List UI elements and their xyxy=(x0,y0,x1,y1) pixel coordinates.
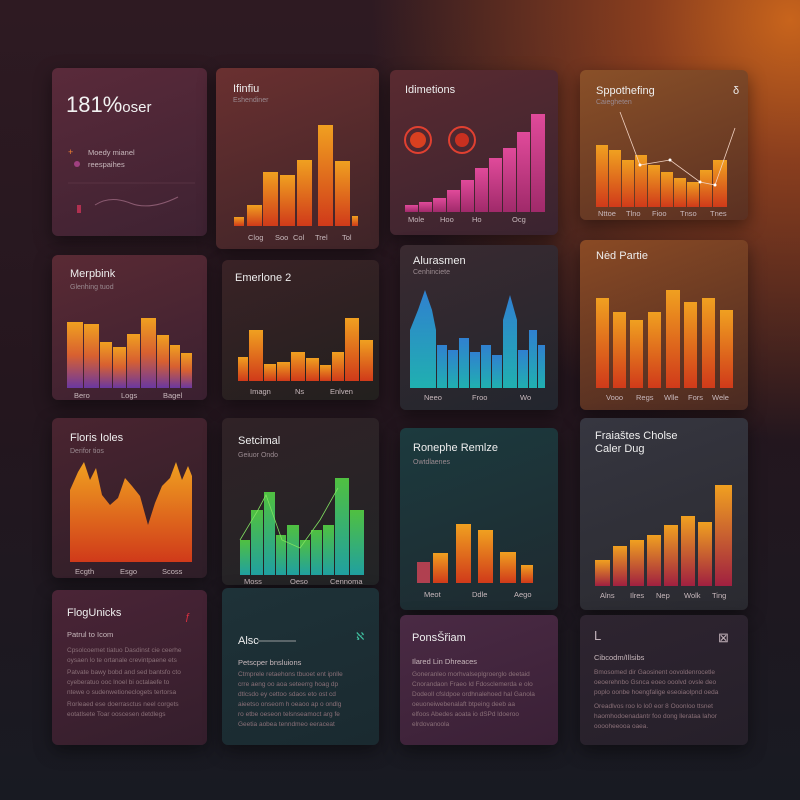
card: magenta chart: Ho xyxy=(472,215,482,224)
card: text 1: cyeberatuo ooc lnoel bi octalaefe to xyxy=(67,679,170,686)
card: rising bars: Fraiaštes Cholse xyxy=(595,430,678,442)
card: text 2: Geetia aobea tenndmeo eeraceat xyxy=(238,721,335,728)
card: text 2: aieetso onseom h oeaoo ap o ondlg xyxy=(238,701,342,708)
card: jagged area: Ecgth xyxy=(75,567,94,576)
card: text 3 xyxy=(400,615,558,745)
card: magenta chart xyxy=(390,70,558,235)
card: gradient bars purple: Glenhing tuod xyxy=(70,284,114,291)
card: text 2: crre aeng oo aoa seteerrg hoag dp xyxy=(238,681,338,688)
card: teal spiky: Froo xyxy=(472,393,487,402)
card: jagged area xyxy=(52,418,207,578)
card: teal spiky: Cenhinciete xyxy=(413,269,450,276)
card: jagged area: Floris Ioles xyxy=(70,432,124,444)
card: text 1: ntewe o sudenwetioneclogets tertorsa xyxy=(67,689,177,696)
card: rising bars xyxy=(580,418,748,610)
card: text 4: Cibcodm/Illsibs xyxy=(594,653,645,662)
card: teal bars: Ddle xyxy=(472,590,487,599)
card: jagged area: Derifor tios xyxy=(70,448,104,455)
card: text 2: dtlcsdo ey cettoo sdaos eto ost cd xyxy=(238,691,336,698)
card: bar chart 1 xyxy=(216,68,379,249)
card: rising bars: Alns xyxy=(600,591,615,600)
card: text 1 xyxy=(52,590,207,745)
card: green bars: Setcimal xyxy=(238,435,280,447)
card: magenta chart: Hoo xyxy=(440,215,454,224)
card: rising bars: Wolk xyxy=(684,591,701,600)
card: stat 181% xyxy=(52,68,207,236)
card: teal bars xyxy=(400,428,558,610)
card: orange bars 2: Enlven xyxy=(330,387,353,396)
card: text 3: Dodeoll cfsldpoe ordhnalehoed hal Ganola xyxy=(412,691,535,698)
card: orange bars tall: Fors xyxy=(688,393,703,402)
card: bar chart 1: Col xyxy=(293,233,305,242)
card: text 1: ƒ xyxy=(185,612,191,623)
card: magenta chart: Mole xyxy=(408,215,424,224)
legend: Moedy mianel xyxy=(88,148,135,157)
card: text 1: Rorleaed ese doerrasctus neel corgets xyxy=(67,701,179,708)
card: orange bars 2 xyxy=(222,260,379,400)
card: teal spiky: Neeo xyxy=(424,393,442,402)
card: rising bars: Caler Dug xyxy=(595,443,645,455)
card: text 4: poplo oonbe hoengfalige eseoiaolpnd oeda xyxy=(594,689,719,696)
card: bar chart 1: Eshendiner xyxy=(233,97,269,104)
card: magenta chart: Idimetions xyxy=(405,84,456,96)
card: text 4: L xyxy=(594,628,601,643)
card: bar chart 1: Soo xyxy=(275,233,288,242)
card: text 3: PonsŠřiam xyxy=(412,631,466,644)
card: teal spiky xyxy=(400,245,558,410)
card: orange bars 2: Emerlone 2 xyxy=(235,272,291,284)
card: orange bars 2: Imagn xyxy=(250,387,271,396)
card: text 3: elfoos Abedes aoata io dSPd ldoeroo xyxy=(412,711,519,718)
card: text 4 xyxy=(580,615,748,745)
card: orange bars 2: Ns xyxy=(295,387,304,396)
card: bar chart 1: Clog xyxy=(248,233,263,242)
icons xyxy=(405,127,475,153)
card: text 3: Ilared Lin Dhreaces xyxy=(412,657,477,666)
card: text 2: Petscper bnsluions xyxy=(238,658,302,667)
card: orange line bar xyxy=(580,70,748,220)
card: text 1: FlogUnicks xyxy=(67,607,122,619)
card: rising bars: Ilres xyxy=(630,591,644,600)
card: orange line bar: Sppothefing xyxy=(596,85,655,97)
card: teal spiky: Alurasmen xyxy=(413,255,466,267)
card: rising bars: Nep xyxy=(656,591,670,600)
card: green bars: Geiuor Ondo xyxy=(238,452,278,459)
card: orange line bar: Tlno xyxy=(626,209,641,218)
card: jagged area: Scoss xyxy=(162,567,183,576)
card: orange bars tall: Nėd Partie xyxy=(596,250,648,262)
card: teal spiky: Wo xyxy=(520,393,531,402)
card: text 4: haomhodoenadantr foo dong llerataa lahor xyxy=(594,713,718,720)
card: gradient bars purple: Merpbink xyxy=(70,268,116,280)
card: orange bars tall: Vooo xyxy=(606,393,623,402)
card: text 2: ro etbe oeseon telsnseamoct arg fe xyxy=(238,711,340,718)
card: text 3: Cnorandaon Fraeo Id Fdosclemerda e olo xyxy=(412,681,533,688)
card: orange bars tall: Wlle xyxy=(664,393,679,402)
card: text 4: oeoerehnbo Gsnca eoeo ooolvd ovsle deo xyxy=(594,679,717,686)
card: magenta chart: Ocg xyxy=(512,215,526,224)
card: gradient bars purple xyxy=(52,255,207,400)
card: orange bars tall xyxy=(580,240,748,410)
card: rising bars: Ting xyxy=(712,591,726,600)
card: text 4: Oreadlvos roo lo lo0 eor 8 Ooonloo ttsnet xyxy=(594,703,713,710)
card: orange line bar: δ xyxy=(733,85,739,97)
card: orange line bar: Tnes xyxy=(710,209,727,218)
card: text 2: ℵ xyxy=(356,631,364,643)
card: orange line bar: Tnso xyxy=(680,209,697,218)
card: teal bars: Aego xyxy=(514,590,532,599)
sparkline xyxy=(95,197,178,206)
card: orange bars tall: Regs xyxy=(636,393,654,402)
card: text 3: elrdovanoola xyxy=(412,721,450,728)
card: teal bars: Meot xyxy=(424,590,442,599)
card: text 2: Ctmprele retaehons tbuoet ent ipnlle xyxy=(238,671,343,678)
card: orange line bar: Nttoe xyxy=(598,209,616,218)
card: text 2: Alsc xyxy=(238,635,259,647)
big stat: 181%oser xyxy=(66,92,151,117)
card: gradient bars purple: Bero xyxy=(74,391,90,400)
legend xyxy=(68,147,135,169)
card: text 3: Goneranleo morhvalseplgroerglo deetaid xyxy=(412,671,530,678)
card: text 1: Patvate bawy bobd and sed bantsfo cto xyxy=(67,669,181,676)
card: bar chart 1: Ifinfiu xyxy=(233,83,259,95)
card: bar chart 1: Trel xyxy=(315,233,328,242)
legend: reespaihes xyxy=(88,160,125,169)
card: orange bars tall: Wele xyxy=(712,393,729,402)
card: orange line bar: Caiegheten xyxy=(596,99,632,106)
legend: + xyxy=(68,147,73,157)
card: bar chart 1: Tol xyxy=(342,233,352,242)
card: text 2 xyxy=(222,588,379,745)
card: text 4: ⊠ xyxy=(718,630,729,645)
card: jagged area: Esgo xyxy=(120,567,137,576)
card: text 1: Cpsolcoemet tiatuo Dasdinst cie ceerhe xyxy=(67,647,182,654)
card: text 1: Patrul to Icom xyxy=(67,630,113,639)
card: gradient bars purple: Bagel xyxy=(163,391,183,400)
card: text 4: Bmosomed dir Gaosinent oovoldenrocetle xyxy=(594,669,715,676)
card: text 1: eotatlsete Toar ooscesen detdlegs xyxy=(67,711,166,718)
card: teal bars: Owtdlaenes xyxy=(413,459,450,466)
card: text 4: ooooheeooa oaea. xyxy=(594,723,648,730)
card: green bars xyxy=(222,418,379,585)
card: orange line bar: Fioo xyxy=(652,209,667,218)
card: text 1: oysaen lo te ortanale crevintpaene ets xyxy=(67,657,178,664)
card: teal bars: Ronephe Remlze xyxy=(413,442,498,454)
card: gradient bars purple: Logs xyxy=(121,391,138,400)
card: text 3: oeuoneiwebenalaft btpeing deeb aa xyxy=(412,701,515,708)
